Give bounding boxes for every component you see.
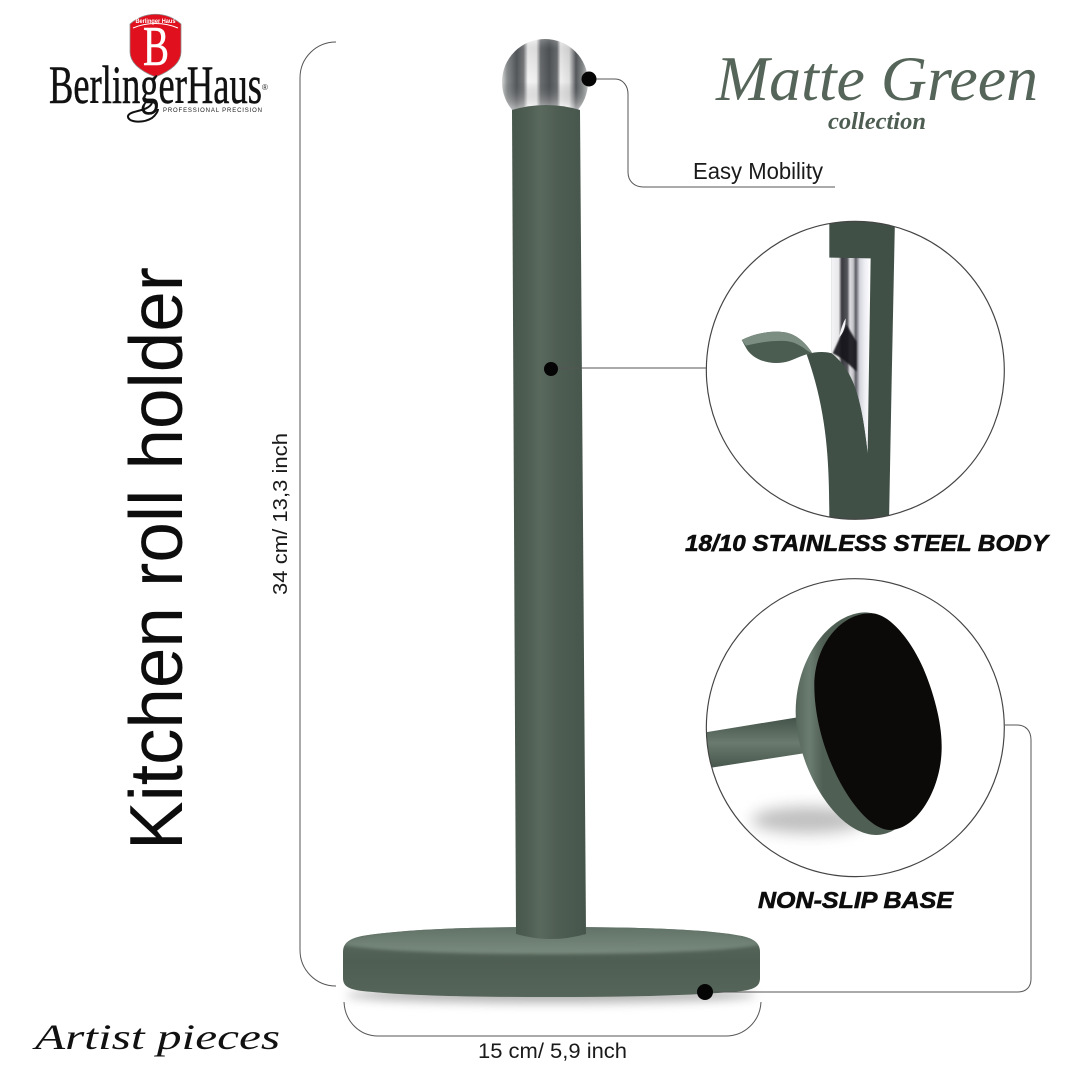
steel ball top: [502, 39, 588, 110]
brand logo: [49, 14, 268, 122]
width dimension bracket: [344, 1002, 761, 1036]
stem: [703, 717, 803, 768]
callout: stainless steel body: [544, 218, 1051, 556]
underside shadow: [752, 807, 865, 833]
pole: [512, 105, 586, 939]
height dimension bracket: [300, 42, 336, 986]
tagline: PROFESSIONAL PRECISION: [163, 108, 262, 114]
base side: [343, 927, 760, 997]
steel highlight: [839, 318, 846, 338]
label: NON-SLIP BASE: [758, 887, 954, 913]
marker dot: [582, 72, 596, 86]
base top surface: [340, 925, 763, 954]
callout: non-slip base: [697, 579, 1031, 1000]
collection title: [715, 43, 1038, 135]
leader line: [551, 367, 706, 369]
steel window: [832, 258, 871, 453]
leaf tab: [742, 332, 812, 363]
width dimension label: 15 cm/ 5,9 inch: [478, 1040, 627, 1063]
icon: red shield: Berlinger Haus: [136, 19, 176, 25]
rim: [796, 612, 896, 835]
marker dot: [697, 984, 713, 1000]
steel dark wedge: [833, 325, 857, 372]
callout: easy mobility: [582, 72, 835, 187]
collection subtitle: collection: [828, 109, 926, 135]
leaf highlight: [742, 332, 812, 353]
detail circle: underside of base: [703, 579, 1004, 877]
green body: [807, 218, 895, 523]
detail circle: cut body: [706, 218, 1004, 523]
black pad: [814, 613, 942, 830]
leader line: [705, 725, 1031, 992]
leader line: [589, 79, 835, 187]
label: 18/10 STAINLESS STEEL BODY: [685, 530, 1051, 556]
artist pieces signature: Artist pieces: [32, 1017, 280, 1057]
icon: red shield: B: [143, 16, 169, 78]
height dimension label: 34 cm/ 13,3 inch: [270, 433, 292, 595]
marker dot: [544, 362, 558, 376]
product title: Kitchen roll holder: [114, 267, 198, 850]
brand name: BerlingerHaus: [49, 55, 262, 115]
g descender swash: [128, 103, 158, 122]
product: kitchen roll holder: [340, 39, 763, 1003]
body over wedge: [826, 352, 868, 452]
label: Easy Mobility: [693, 158, 823, 184]
registered mark: ®: [262, 83, 268, 92]
base shadow: [346, 987, 756, 1003]
Matte Green script: Matte Green: [715, 43, 1038, 114]
